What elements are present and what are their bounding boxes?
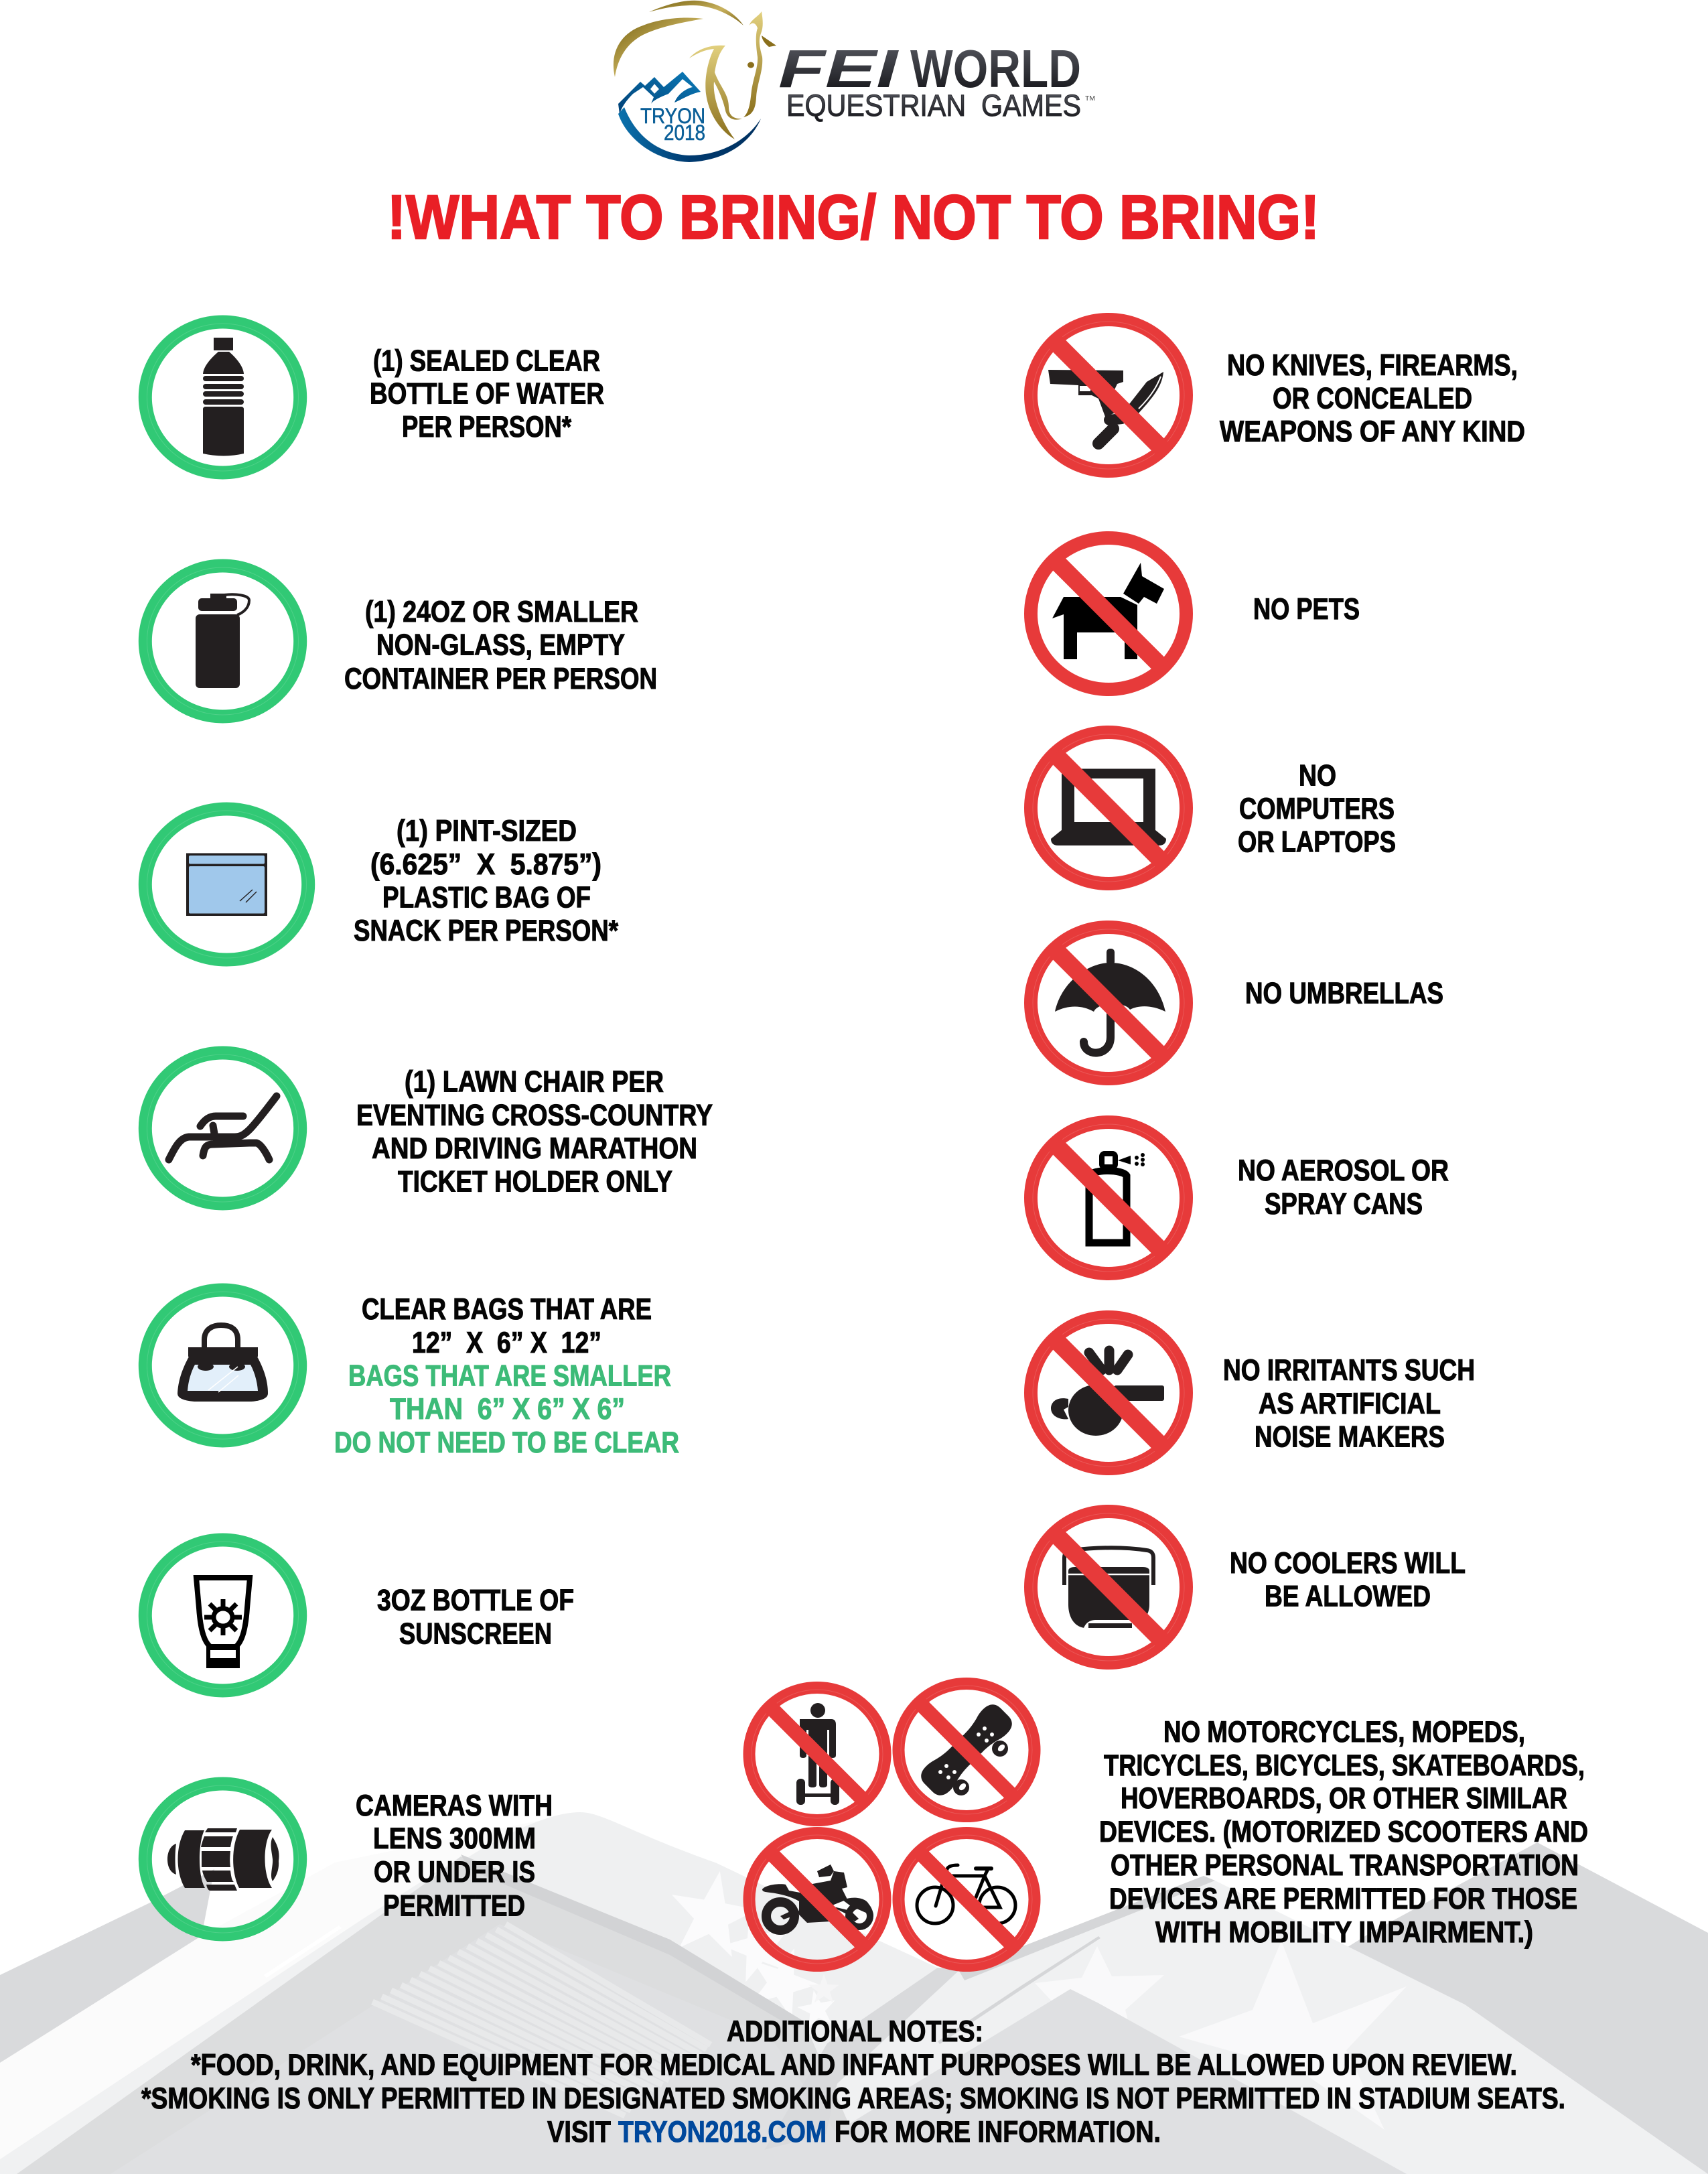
- text: plastic bag: (1) PINT-SIZED: [397, 815, 577, 847]
- panel: prohibited - coolers: [1031, 1511, 1466, 1663]
- text: noise makers: NOISE MAKERS: [1255, 1420, 1445, 1454]
- icon: spray can: [1031, 1122, 1186, 1274]
- text: sunscreen: [377, 1584, 574, 1650]
- text: computers: COMPUTERS: [1239, 793, 1395, 825]
- text: weapons: NO KNIVES, FIREARMS,: [1227, 349, 1518, 382]
- text: computers: OR LAPTOPS: [1238, 826, 1396, 859]
- icon: sunscreen tube: [145, 1540, 300, 1691]
- text: sealed clear bottle: PER PERSON*: [402, 411, 572, 444]
- text: aerosol: [1238, 1154, 1449, 1221]
- icon: motorcycle: [749, 1833, 885, 1966]
- additional notes: VISIT: [547, 2116, 611, 2149]
- text: weapons: [1220, 349, 1525, 448]
- text: personal transportation: DEVICES ARE PERMITTED FOR THOSE: [1109, 1883, 1577, 1915]
- logo: FEI World Equestrian Games Tryon 2018: [614, 1, 1095, 162]
- text: pets: NO PETS: [1253, 593, 1360, 626]
- text: plastic bag: (6.625” X 5.875”): [370, 848, 601, 881]
- icon: cooler: [1031, 1511, 1186, 1663]
- text: cameras: LENS 300MM: [373, 1822, 536, 1855]
- text: cameras: CAMERAS WITH: [356, 1789, 553, 1822]
- text: sunscreen: 3OZ BOTTLE OF: [377, 1584, 574, 1617]
- text: personal transportation: HOVERBOARDS, OR OTHER SIMILAR: [1121, 1782, 1567, 1815]
- text: personal transportation: NO MOTORCYCLES, MOPEDS,: [1163, 1716, 1525, 1749]
- text: aerosol: SPRAY CANS: [1265, 1188, 1423, 1221]
- panel: allowed - empty container: [145, 565, 657, 717]
- panel: prohibited - aerosol: [1031, 1122, 1449, 1274]
- icon: hoverboard rider: [749, 1688, 885, 1820]
- panel: prohibited - pets: [1031, 538, 1360, 689]
- text: weapons: WEAPONS OF ANY KIND: [1220, 415, 1525, 448]
- text: empty container: NON-GLASS, EMPTY: [376, 628, 625, 662]
- panel: prohibited - umbrellas: [1031, 927, 1443, 1079]
- icon: plastic bag: [145, 809, 308, 959]
- text: sunscreen: SUNSCREEN: [399, 1617, 552, 1650]
- text: noise makers: AS ARTIFICIAL: [1259, 1387, 1441, 1420]
- logo: FEI World Equestrian Games Tryon 2018: TRYON: [640, 104, 705, 128]
- text: coolers: BE ALLOWED: [1265, 1580, 1431, 1613]
- icon: water bottle: [145, 322, 300, 473]
- text: clear bags: [334, 1293, 679, 1459]
- logo: FEI World Equestrian Games Tryon 2018: EQUESTRIAN GAMES: [786, 88, 1081, 123]
- panel: prohibited - noise makers: [1031, 1317, 1475, 1469]
- panel: allowed - sunscreen: [145, 1540, 574, 1691]
- panel: allowed - clear bags: [145, 1290, 679, 1459]
- background: grey mountains and stars: [0, 1775, 1708, 2174]
- panel: allowed - camera lens: [145, 1783, 553, 1935]
- text: computers: NO: [1299, 759, 1336, 792]
- text: sealed clear bottle: [370, 344, 604, 444]
- icon: umbrella: [1031, 927, 1186, 1079]
- icon: camera lens: [145, 1783, 300, 1935]
- panel: allowed - plastic bag of snack: [145, 809, 619, 959]
- text: clear bags: 12” X 6” X 12”: [412, 1327, 601, 1359]
- text: empty container: (1) 24OZ OR SMALLER: [365, 596, 638, 628]
- icon: dog: [1031, 538, 1186, 689]
- text: plastic bag: [354, 815, 619, 947]
- icon: reusable bottle: [145, 565, 300, 717]
- additional notes: [141, 2015, 1565, 2149]
- text: computers: [1238, 759, 1396, 859]
- panel: prohibited - personal transportation: [749, 1684, 1588, 1966]
- text: noise makers: NO IRRITANTS SUCH: [1223, 1354, 1475, 1387]
- icon: gun and knife: [1031, 320, 1186, 471]
- text: plastic bag: SNACK PER PERSON*: [354, 914, 619, 947]
- text: clear bags: THAN 6” X 6” X 6”: [390, 1393, 625, 1426]
- text: personal transportation: WITH MOBILITY IMPAIRMENT.): [1155, 1916, 1533, 1949]
- text: aerosol: NO AEROSOL OR: [1238, 1154, 1449, 1187]
- panel: allowed - sealed water bottle: [145, 322, 604, 473]
- panel: prohibited - weapons: [1031, 320, 1525, 471]
- icon: clear handbag: [145, 1290, 300, 1440]
- icon: laptop: [1031, 732, 1186, 884]
- text: clear bags: CLEAR BAGS THAT ARE: [362, 1293, 652, 1326]
- text: plastic bag: PLASTIC BAG OF: [382, 882, 591, 914]
- text: noise makers: [1223, 1354, 1475, 1454]
- panel: allowed - lawn chair: [145, 1053, 713, 1203]
- panel: prohibited - computers: [1031, 732, 1396, 884]
- text: cameras: OR UNDER IS: [374, 1856, 535, 1889]
- text: empty container: [344, 596, 657, 695]
- icon: noise maker: [1031, 1317, 1186, 1469]
- text: umbrellas: NO UMBRELLAS: [1245, 977, 1443, 1010]
- text: coolers: NO COOLERS WILL: [1230, 1547, 1466, 1580]
- text: lawn chair: [356, 1066, 713, 1199]
- logo: FEI World Equestrian Games Tryon 2018: TM: [1085, 95, 1095, 103]
- additional notes: ADDITIONAL NOTES:: [727, 2015, 983, 2048]
- text: coolers: [1230, 1547, 1466, 1613]
- text: personal transportation: OTHER PERSONAL TRANSPORTATION: [1111, 1849, 1579, 1882]
- text: sealed clear bottle: (1) SEALED CLEAR: [373, 344, 600, 378]
- text: clear bags: BAGS THAT ARE SMALLER: [348, 1359, 671, 1392]
- text: clear bags: DO NOT NEED TO BE CLEAR: [334, 1426, 679, 1459]
- text: weapons: OR CONCEALED: [1273, 382, 1472, 415]
- text: cameras: [356, 1789, 553, 1923]
- logo: FEI World Equestrian Games Tryon 2018: WORLD: [910, 39, 1081, 98]
- text: sealed clear bottle: BOTTLE OF WATER: [370, 378, 604, 410]
- logo: FEI World Equestrian Games Tryon 2018: FEI: [778, 39, 900, 98]
- icon: lawn chair: [145, 1053, 300, 1203]
- additional notes: FOR MORE INFORMATION.: [835, 2116, 1161, 2149]
- icon: skateboard: [899, 1684, 1034, 1816]
- text: lawn chair: (1) LAWN CHAIR PER: [405, 1066, 664, 1099]
- logo: FEI World Equestrian Games Tryon 2018: 2018: [664, 121, 705, 145]
- additional notes: TRYON2018.COM: [618, 2116, 827, 2149]
- text: personal transportation: DEVICES. (MOTORIZED SCOOTERS AND: [1099, 1816, 1588, 1848]
- text: lawn chair: EVENTING CROSS-COUNTRY: [356, 1099, 713, 1132]
- text: lawn chair: AND DRIVING MARATHON: [372, 1132, 697, 1165]
- text: empty container: CONTAINER PER PERSON: [344, 663, 657, 695]
- text: lawn chair: TICKET HOLDER ONLY: [398, 1166, 672, 1199]
- text: cameras: PERMITTED: [383, 1889, 525, 1923]
- icon: bicycle: [899, 1833, 1034, 1966]
- text: personal transportation: TRICYCLES, BICYCLES, SKATEBOARDS,: [1104, 1749, 1585, 1782]
- title: !WHAT TO BRING/ NOT TO BRING!: [387, 182, 1320, 252]
- text: personal transportation: [1099, 1716, 1588, 1949]
